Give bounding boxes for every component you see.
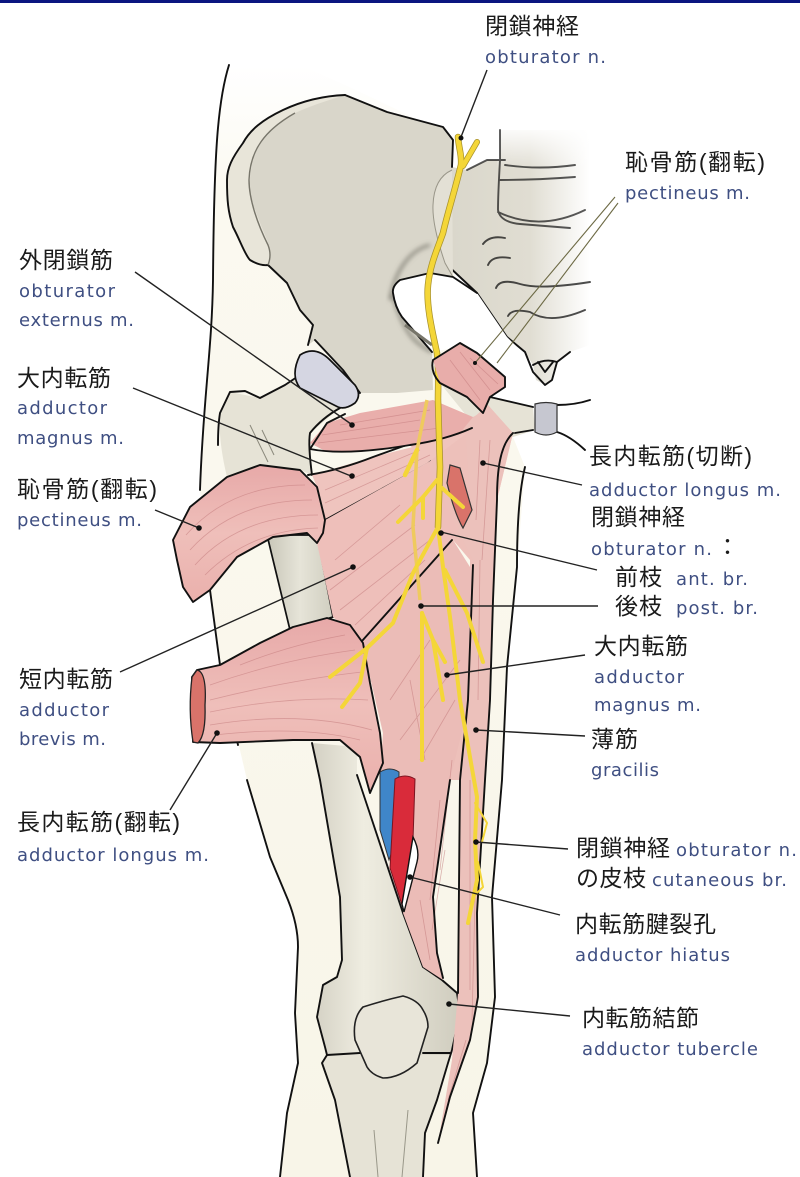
label: obturator nerve branches: 閉鎖神経 bbox=[591, 504, 685, 530]
femoral vein bbox=[380, 769, 399, 860]
label: obturator nerve branches: post. br. bbox=[676, 598, 758, 619]
pectineus band reflected bbox=[173, 465, 325, 602]
label: adductor tubercle bbox=[582, 1005, 758, 1060]
sacrum and vertebrae bbox=[440, 125, 597, 385]
label: adductor magnus right: 大内転筋 bbox=[594, 633, 688, 659]
label: adductor brevis bbox=[19, 666, 113, 750]
femur shaft upper bbox=[267, 535, 333, 630]
label: cutaneous branch: obturator n. bbox=[676, 840, 797, 861]
leader lines bbox=[120, 70, 598, 1016]
label: obturator nerve branches: 後枝 bbox=[615, 593, 662, 619]
femoral head cartilage bbox=[295, 351, 358, 408]
label: adductor hiatus bbox=[575, 911, 730, 966]
label: adductor brevis: adductor bbox=[19, 700, 110, 721]
label: adductor longus reflected bbox=[17, 809, 209, 866]
femur: greater trochanter and neck bbox=[218, 377, 340, 477]
deep pink muscle base bbox=[410, 408, 513, 780]
label: obturator nerve top: 閉鎖神経 bbox=[485, 13, 579, 39]
label: cutaneous branch: 閉鎖神経 bbox=[576, 835, 670, 861]
label: cutaneous branch: の皮枝 bbox=[576, 865, 646, 891]
adductor magnus upper bbox=[308, 433, 467, 519]
patella bbox=[354, 996, 428, 1078]
nerve branches over adductor longus bbox=[330, 648, 367, 707]
label: pectineus right: 恥骨筋(翻転) bbox=[625, 149, 765, 175]
label: adductor longus reflected: 長内転筋(翻転) bbox=[17, 809, 180, 835]
leader dots bbox=[196, 136, 486, 1007]
label: gracilis bbox=[591, 726, 659, 781]
pectineus nerve thread bbox=[475, 197, 618, 363]
label: adductor magnus left: adductor bbox=[17, 398, 108, 419]
label: adductor hiatus: adductor hiatus bbox=[575, 945, 730, 966]
label: adductor magnus left: magnus m. bbox=[17, 428, 124, 449]
label: adductor magnus left: 大内転筋 bbox=[17, 365, 111, 391]
label: adductor longus cut: adductor longus m. bbox=[589, 480, 781, 501]
pelvis: ilium and ischium bbox=[227, 95, 453, 393]
label: pectineus right: pectineus m. bbox=[625, 183, 750, 204]
label: adductor hiatus: 内転筋腱裂孔 bbox=[575, 911, 716, 937]
label: pectineus left: 恥骨筋(翻転) bbox=[17, 476, 157, 502]
label: adductor magnus right bbox=[594, 633, 701, 716]
label: adductor longus reflected: adductor longus m. bbox=[17, 845, 209, 866]
label: adductor magnus left bbox=[17, 365, 124, 449]
femur shaft lower and condyles bbox=[312, 743, 460, 1177]
pubic bones and symphysis bbox=[440, 383, 590, 450]
label: adductor brevis: 短内転筋 bbox=[19, 666, 113, 692]
label: adductor brevis: brevis m. bbox=[19, 729, 106, 750]
obturator foramen bbox=[393, 273, 520, 377]
label: adductor magnus right: magnus m. bbox=[594, 695, 701, 716]
pectineus stump bbox=[432, 343, 505, 413]
label: obturator nerve top bbox=[485, 13, 606, 68]
obturator externus bbox=[310, 400, 473, 452]
label: pectineus right bbox=[625, 149, 765, 204]
label: pectineus left: pectineus m. bbox=[17, 510, 142, 531]
adductor hiatus opening bbox=[402, 837, 418, 912]
obturator nerve bbox=[367, 137, 487, 923]
label: obturator externus: 外閉鎖筋 bbox=[19, 247, 113, 273]
adductor brevis bbox=[317, 460, 458, 643]
label: gracilis: gracilis bbox=[591, 760, 659, 781]
label: adductor tubercle: 内転筋結節 bbox=[582, 1005, 699, 1031]
adductor longus reflected bbox=[190, 618, 383, 793]
label: adductor magnus right: adductor bbox=[594, 667, 685, 688]
label: obturator nerve branches: ant. br. bbox=[676, 569, 748, 590]
label: obturator nerve branches: obturator n. bbox=[591, 539, 712, 560]
label: obturator nerve top: obturator n. bbox=[485, 47, 606, 68]
label: adductor tubercle: adductor tubercle bbox=[582, 1039, 758, 1060]
label: cutaneous branch: cutaneous br. bbox=[652, 870, 787, 891]
label: adductor longus cut bbox=[589, 443, 781, 501]
label: obturator externus bbox=[19, 247, 134, 331]
leg skin silhouette bbox=[200, 65, 525, 1177]
adductor magnus lower bbox=[360, 540, 476, 980]
gracilis and adductor longus origin bbox=[438, 405, 513, 1143]
top border bar bbox=[0, 0, 800, 3]
label: obturator nerve branches: 前枝 bbox=[615, 564, 662, 590]
femoral artery bbox=[390, 776, 415, 905]
label: cutaneous branch bbox=[576, 835, 797, 891]
label: obturator nerve branches bbox=[591, 504, 758, 619]
label: gracilis: 薄筋 bbox=[591, 726, 638, 752]
label: pectineus left bbox=[17, 476, 157, 531]
label: obturator externus: obturator bbox=[19, 281, 116, 302]
label: obturator nerve branches: ： bbox=[716, 534, 739, 560]
label: obturator externus: externus m. bbox=[19, 310, 134, 331]
label: adductor longus cut: 長内転筋(切断) bbox=[589, 443, 752, 469]
adductor longus cut end bbox=[447, 465, 472, 528]
